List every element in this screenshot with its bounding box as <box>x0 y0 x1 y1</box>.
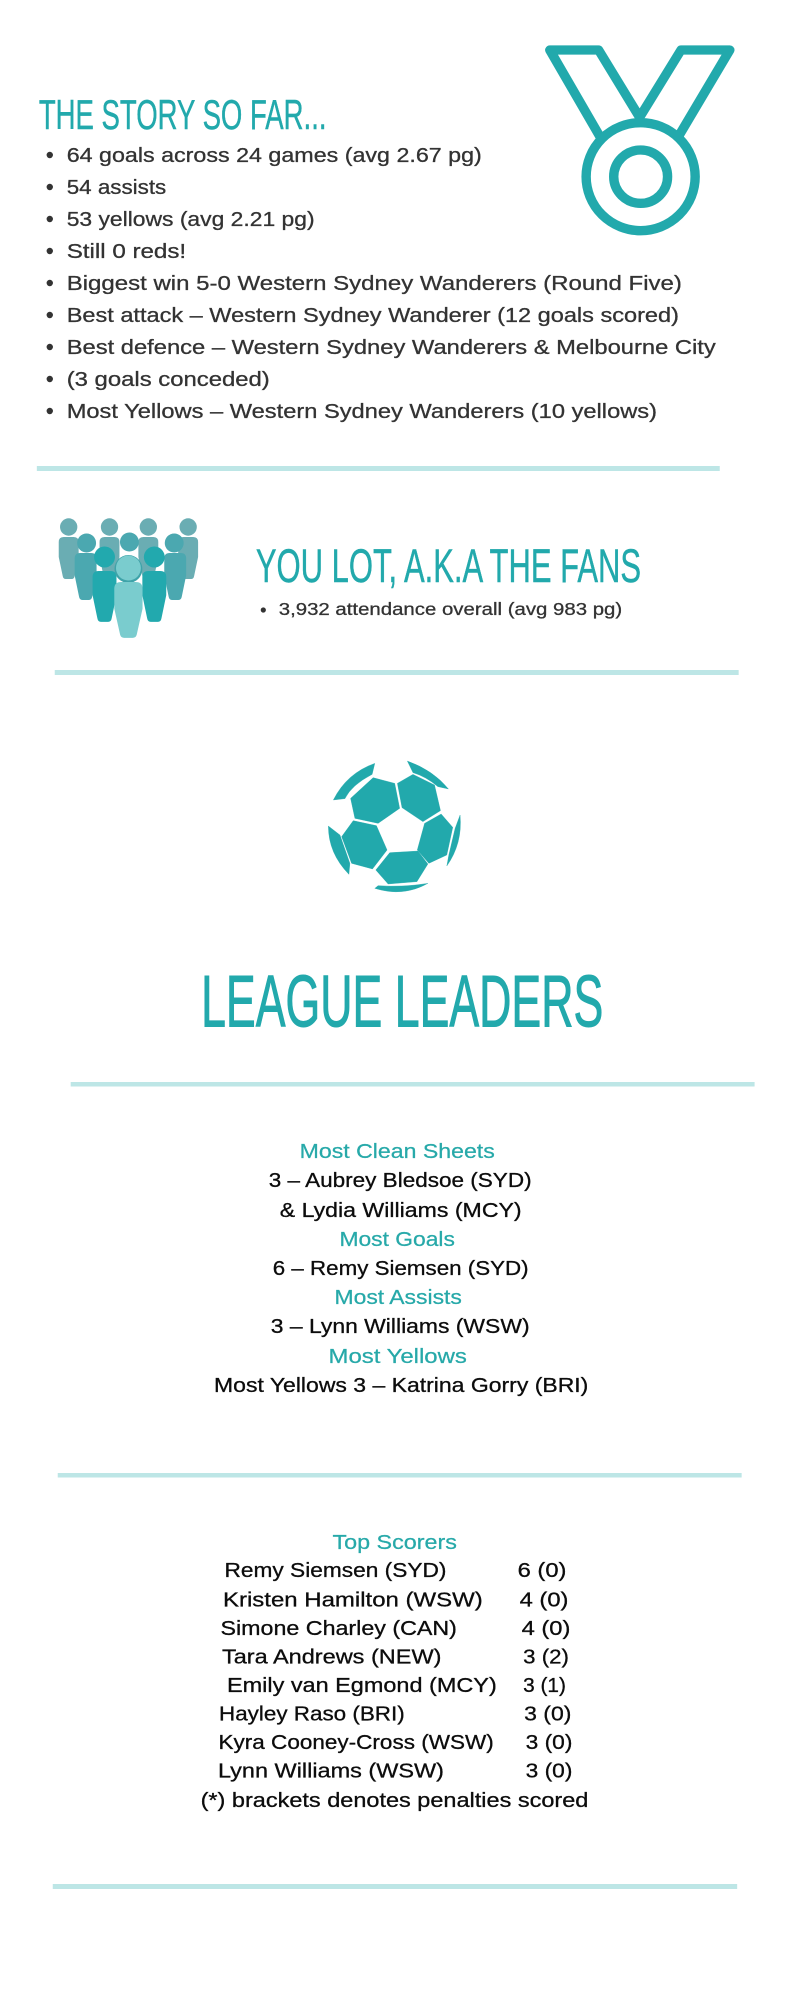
category: most clean sheets: & Lydia Williams (MCY) <box>280 1199 522 1222</box>
table: scorer rows: 4 (0) <box>520 1588 568 1612</box>
text block: season stats list: Best defence – Western Sydney Wanderers & Melbourne City <box>67 336 717 359</box>
text block: season stats list: 64 goals across 24 games (avg 2.67 pg) <box>67 144 482 167</box>
panel: league leader categories <box>214 1140 588 1397</box>
category: most clean sheets: 3 – Aubrey Bledsoe (SYD) <box>269 1169 532 1192</box>
text block: season stats list: 54 assists <box>67 176 166 199</box>
category: most goals: Most Goals <box>339 1228 455 1251</box>
category: most clean sheets: Most Clean Sheets <box>300 1140 495 1163</box>
table: scorer rows: Simone Charley (CAN) <box>221 1617 457 1640</box>
table: scorer rows: Tara Andrews (NEW) <box>222 1645 442 1669</box>
category: most yellows <box>214 1345 588 1397</box>
table: scorer rows: 3 (1) <box>523 1674 566 1697</box>
table: scorer rows: 6 (0) <box>518 1559 566 1582</box>
table: scorer rows: Lynn Williams (WSW) <box>218 1759 444 1783</box>
table: scorer rows: Remy Siemsen (SYD) <box>224 1559 446 1582</box>
category: most goals <box>273 1228 529 1280</box>
category: most assists: Most Assists <box>334 1286 462 1309</box>
panel: the story so far <box>39 50 730 423</box>
category: most clean sheets <box>269 1140 532 1222</box>
text block: season stats list: Most Yellows – Western Sydney Wanderers (10 yellows) <box>67 400 657 423</box>
text block: attendance: 3,932 attendance overall (avg 983 pg) <box>279 599 622 619</box>
text block: season stats list: 53 yellows (avg 2.21 pg) <box>67 208 315 231</box>
table: scorer rows: 3 (0) <box>526 1731 572 1754</box>
footnote: penalties: (*) brackets denotes penalties scored <box>201 1789 588 1812</box>
icon: medal <box>550 50 730 231</box>
category: most assists: 3 – Lynn Williams (WSW) <box>271 1315 530 1338</box>
heading: the story so far: THE STORY SO FAR... <box>39 91 327 138</box>
category: most goals: 6 – Remy Siemsen (SYD) <box>273 1257 529 1280</box>
text block: season stats list: (3 goals conceded) <box>67 368 270 391</box>
panel: top scorers <box>201 1531 588 1812</box>
text block: season stats list: Best attack – Western Sydney Wanderer (12 goals scored) <box>67 304 679 327</box>
text block: season stats list <box>47 144 717 423</box>
table: scorer rows: Hayley Raso (BRI) <box>219 1702 405 1726</box>
icon: crowd of people <box>59 518 198 638</box>
table: scorer rows: 3 (0) <box>526 1759 572 1783</box>
icon: soccer ball <box>328 761 460 892</box>
category: most yellows: Most Yellows <box>329 1345 467 1368</box>
panel: the fans <box>59 518 641 638</box>
table: scorer rows: 3 (0) <box>524 1702 571 1726</box>
table: scorer rows: 4 (0) <box>522 1617 570 1640</box>
table: scorer rows: Kyra Cooney-Cross (WSW) <box>219 1731 494 1754</box>
table: scorer rows <box>218 1559 572 1783</box>
text block: season stats list: Biggest win 5-0 Western Sydney Wanderers (Round Five) <box>67 272 682 295</box>
text block: season stats list: Still 0 reds! <box>67 240 186 263</box>
table: scorer rows: 3 (2) <box>523 1645 569 1669</box>
category: most yellows: Most Yellows 3 – Katrina Gorry (BRI) <box>214 1374 588 1397</box>
table: scorer rows: Emily van Egmond (MCY) <box>227 1674 497 1697</box>
table: scorer rows: Kristen Hamilton (WSW) <box>223 1588 483 1612</box>
category: most assists <box>271 1286 530 1338</box>
heading: top scorers: Top Scorers <box>332 1531 457 1554</box>
